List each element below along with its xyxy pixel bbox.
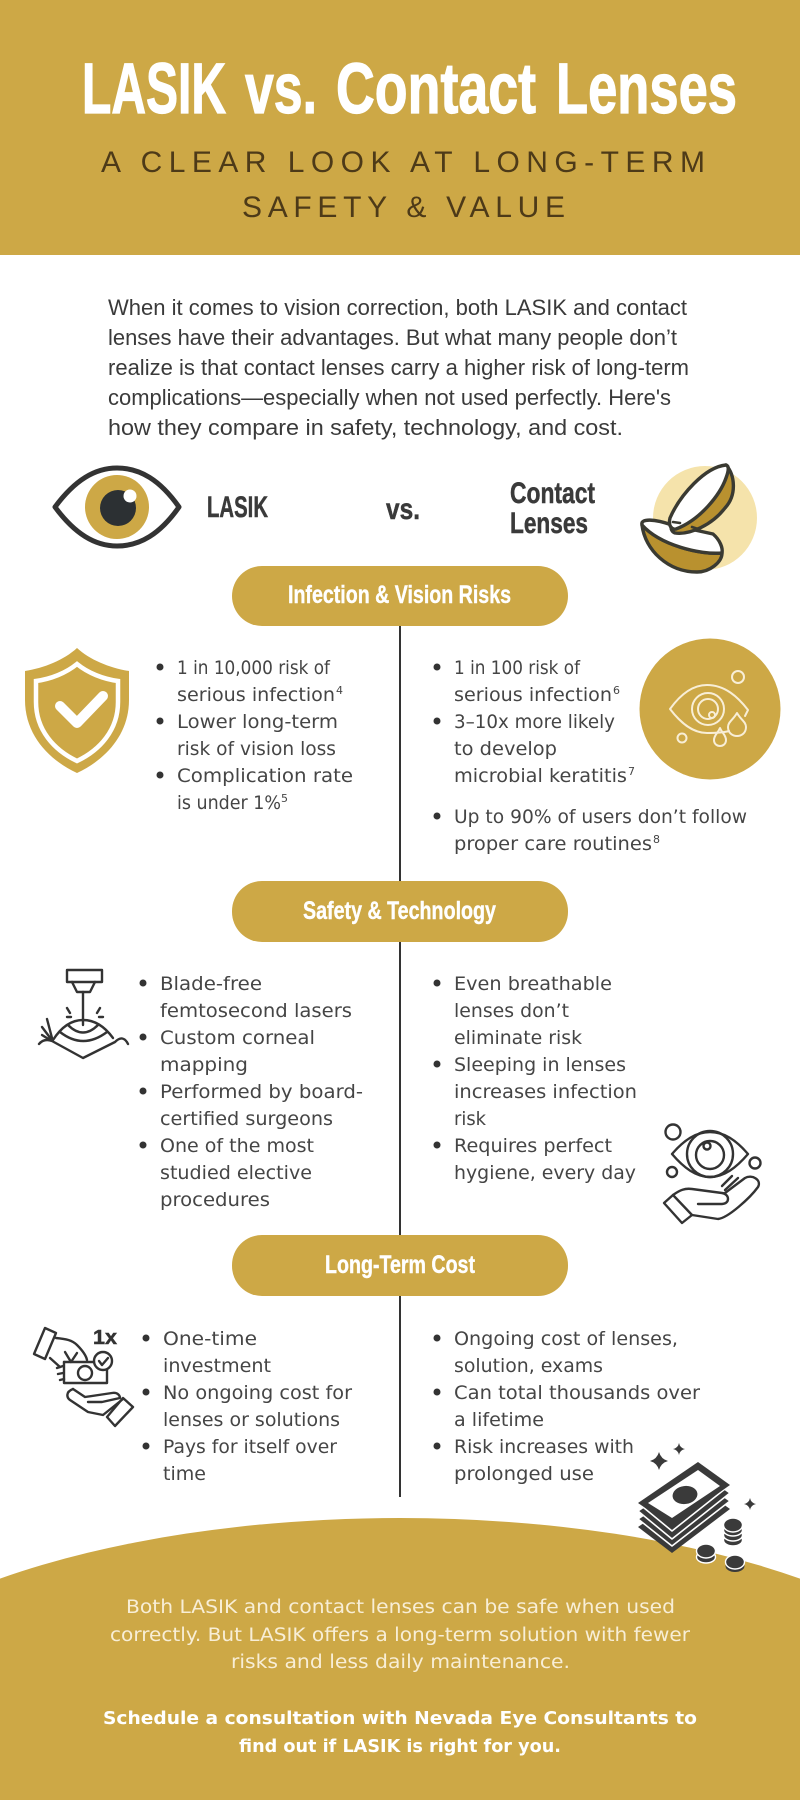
list: contact lens cost facts: Can total thousands over (454, 1382, 700, 1404)
section heading: Safety & Technology: Safety & Technology (303, 897, 496, 925)
call to action: Schedule a consultation with Nevada Eye Consultants to (103, 1709, 697, 1729)
list: LASIK infection facts: 4 (336, 684, 343, 697)
list: contact lens cost facts (434, 1328, 700, 1485)
list: contact lens safety facts: hygiene, every day (454, 1162, 636, 1184)
list: LASIK technology facts: procedures (160, 1189, 270, 1211)
list: LASIK infection facts: Lower long-term (177, 711, 338, 733)
footer summary text: correctly. But LASIK offers a long-term solution with fewer (110, 1625, 690, 1646)
title: LASIK (82, 50, 226, 129)
label: Contact Lenses (510, 477, 595, 540)
list: LASIK cost facts: No ongoing cost for (163, 1382, 352, 1404)
list: contact lens infection facts: 1 in 100 risk of (454, 657, 581, 679)
list: LASIK cost facts: investment (163, 1355, 271, 1377)
list: contact lens safety facts: increases infection (454, 1081, 637, 1103)
footer summary text: risks and less daily maintenance. (231, 1652, 570, 1673)
footer summary text (110, 1597, 690, 1673)
icon: money stack and coins (638, 1443, 756, 1572)
subtitle (101, 146, 705, 224)
list: LASIK technology facts (140, 973, 363, 1211)
list: LASIK technology facts: studied elective (160, 1162, 312, 1184)
icon: irritated eye in circle (640, 638, 780, 780)
list: contact lens infection facts: 7 (628, 765, 635, 778)
list: contact lens cost facts: Ongoing cost of lenses, (454, 1328, 678, 1350)
footer summary text: Both LASIK and contact lenses can be safe when used (126, 1597, 675, 1618)
list: LASIK technology facts: mapping (160, 1054, 248, 1076)
list: contact lens safety facts: lenses don’t (454, 1000, 569, 1022)
list: contact lens infection facts: 3–10x more likely (454, 711, 615, 733)
list: LASIK technology facts: One of the most (160, 1135, 314, 1157)
list: LASIK infection facts: risk of vision loss (177, 738, 336, 760)
list: LASIK cost facts: Pays for itself over (163, 1436, 337, 1458)
list: contact lens infection facts: Up to 90% of users don’t follow (454, 806, 747, 828)
list: LASIK cost facts: time (163, 1463, 206, 1485)
list: LASIK cost facts: One-time (163, 1328, 257, 1350)
intro paragraph: When it comes to vision correction, both LASIK and contact (108, 295, 688, 320)
label: vs.: vs. (386, 493, 420, 526)
label: Contact Lenses: Lenses (510, 507, 588, 540)
list: contact lens safety facts: Even breathable (454, 973, 612, 995)
list: LASIK cost facts (142, 1328, 352, 1485)
divider line (399, 626, 401, 1497)
title (82, 50, 737, 129)
icon: laser on eye (39, 970, 128, 1058)
list: LASIK technology facts: femtosecond lasers (160, 1000, 352, 1022)
label: Contact Lenses: Contact (510, 477, 595, 510)
list: contact lens infection facts: 6 (613, 684, 620, 697)
list: LASIK infection facts (156, 657, 353, 814)
list: LASIK technology facts: Blade-free (160, 973, 262, 995)
list: LASIK technology facts: Custom corneal (160, 1027, 315, 1049)
list: contact lens infection facts (434, 657, 747, 855)
title: Contact (336, 50, 536, 129)
title: Lenses (556, 50, 737, 129)
header banner (0, 0, 800, 255)
call to action (103, 1709, 697, 1757)
section heading: Long-Term Cost (232, 1235, 568, 1296)
list: LASIK infection facts: 5 (281, 792, 288, 805)
list: contact lens safety facts: Requires perfect (454, 1135, 612, 1157)
title: vs. (245, 50, 317, 129)
icon: eye over hand (664, 1124, 760, 1223)
list: LASIK infection facts: Complication rate (177, 765, 353, 787)
list: contact lens safety facts: eliminate risk (454, 1027, 582, 1049)
list: contact lens safety facts: risk (454, 1108, 486, 1130)
intro paragraph: lenses have their advantages. But what many people don’t (108, 325, 678, 350)
section heading: Safety & Technology (232, 881, 568, 942)
footer panel (0, 1518, 800, 1800)
section heading: Infection & Vision Risks: Infection & Vision Risks (288, 581, 511, 609)
icon: one-time payment (34, 1327, 133, 1426)
section heading: Infection & Vision Risks (232, 566, 568, 626)
list: contact lens infection facts: proper care routines (454, 833, 652, 855)
list: LASIK cost facts: lenses or solutions (163, 1409, 340, 1431)
list: contact lens safety facts: Sleeping in lenses (454, 1054, 626, 1076)
list: LASIK infection facts: is under 1% (177, 792, 281, 814)
icon: shield (25, 648, 129, 773)
list: LASIK infection facts: 1 in 10,000 risk of (177, 657, 331, 679)
label: LASIK: LASIK (207, 491, 268, 524)
list: LASIK technology facts: Performed by board- (160, 1081, 363, 1103)
section heading: Long-Term Cost: Long-Term Cost (325, 1251, 476, 1279)
list: contact lens cost facts: prolonged use (454, 1463, 594, 1485)
subtitle: SAFETY & VALUE (242, 191, 565, 224)
list: contact lens cost facts: solution, exams (454, 1355, 603, 1377)
list: contact lens infection facts: to develop (454, 738, 557, 760)
list: contact lens cost facts: Risk increases with (454, 1436, 634, 1458)
icon: eye (55, 468, 179, 546)
intro paragraph (108, 295, 689, 440)
icon: contact lens (642, 465, 757, 572)
intro paragraph: complications—especially when not used perfectly. Here's (108, 385, 671, 410)
list: contact lens safety facts (434, 973, 637, 1184)
call to action: find out if LASIK is right for you. (239, 1737, 561, 1757)
list: contact lens infection facts: microbial keratitis (454, 765, 627, 787)
list: contact lens infection facts: 8 (653, 833, 660, 846)
subtitle: A CLEAR LOOK AT LONG-TERM (101, 146, 705, 179)
list: contact lens cost facts: a lifetime (454, 1409, 544, 1431)
icon: one-time payment: 1x (93, 1327, 117, 1349)
intro paragraph: how they compare in safety, technology, and cost. (108, 415, 623, 440)
list: LASIK infection facts: serious infection (177, 684, 335, 706)
list: contact lens infection facts: serious infection (454, 684, 612, 706)
list: LASIK technology facts: certified surgeons (160, 1108, 333, 1130)
intro paragraph: realize is that contact lenses carry a higher risk of long-term (108, 355, 689, 380)
